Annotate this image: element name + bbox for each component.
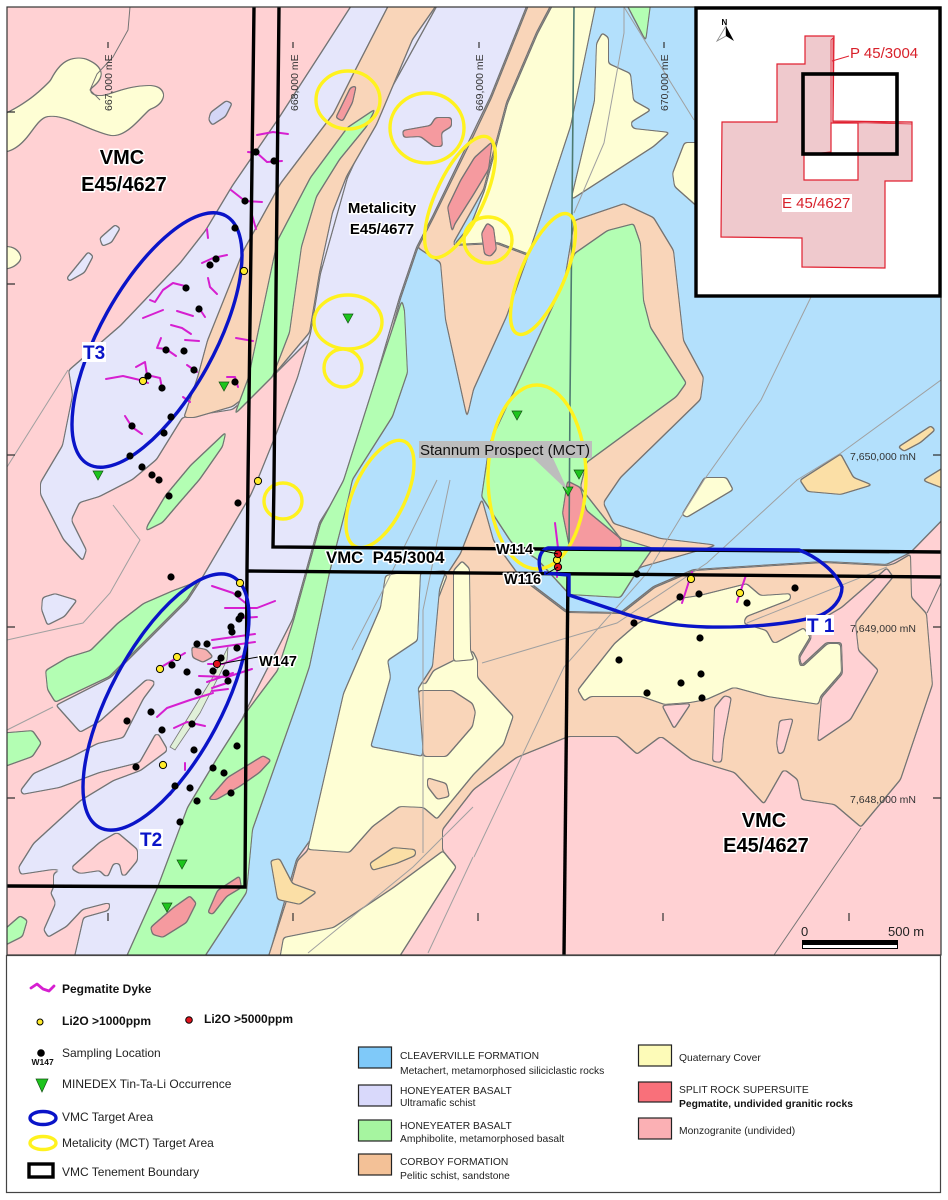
sample leader lines (220, 549, 558, 664)
tenement labels: E45/4627 (723, 835, 809, 857)
grid coordinate labels: 670,000 mE (659, 54, 671, 111)
grid coordinate labels: 7,648,000 mN (850, 794, 916, 806)
legend: Cleaverville Formation: Metachert, metamorphosed siliciclastic rocks (400, 1066, 604, 1077)
sampling locations (123, 148, 799, 826)
legend: Split Rock Supersuite (638, 1082, 853, 1110)
legend: MINEDEX occurrence: MINEDEX Tin-Ta-Li Occurrence (62, 1077, 232, 1091)
tenement labels (81, 147, 809, 857)
legend: Li2O 1000ppm: Li2O >1000ppm (62, 1014, 151, 1028)
tenement labels: VMC P45/3004 (326, 548, 445, 567)
grid coordinate labels: 7,650,000 mN (850, 451, 916, 463)
target labels: T2 (140, 830, 162, 851)
MINEDEX occurrences (93, 314, 584, 912)
inset location map: P 45/3004 (850, 45, 918, 62)
legend: Honeyeater Basalt ultramafic: HONEYEATER BASALT (400, 1086, 512, 1097)
legend: Corboy Formation: Pelitic schist, sandstone (400, 1171, 510, 1182)
tenement labels: E45/4627 (81, 174, 167, 196)
legend: Corboy Formation: CORBOY FORMATION (400, 1157, 508, 1168)
legend: Li2O 5000ppm: Li2O >5000ppm (204, 1012, 293, 1026)
legend: sampling location: W147 (32, 1057, 54, 1067)
legend: pegmatite dyke: Pegmatite Dyke (62, 982, 152, 996)
legend: Split Rock Supersuite: SPLIT ROCK SUPERSUITE (679, 1085, 809, 1096)
scale bar: 0 (801, 924, 808, 939)
target labels: T3 (83, 343, 105, 364)
legend: Honeyeater Basalt ultramafic (358, 1085, 512, 1109)
callout: Stannum Prospect (419, 441, 592, 491)
icon: north arrow (717, 18, 734, 41)
tenement labels: VMC (742, 810, 786, 832)
legend: tenement boundary: VMC Tenement Boundary (62, 1165, 199, 1179)
legend: Quaternary Cover: Quaternary Cover (679, 1053, 761, 1064)
grid coordinate labels: 668,000 mE (289, 54, 301, 111)
legend: Split Rock Supersuite: Pegmatite, undivided granitic rocks (679, 1099, 853, 1110)
Li2O over 5000ppm points (213, 550, 562, 668)
tenement labels: W116 (504, 572, 541, 588)
tenement labels: Metalicity (348, 200, 417, 217)
legend: Monzogranite (638, 1118, 795, 1139)
grid coordinate labels: 669,000 mE (474, 54, 486, 111)
legend: Metalicity target area: Metalicity (MCT) Target Area (62, 1136, 214, 1150)
VMC target areas T1 T2 T3 (38, 188, 842, 854)
legend: Honeyeater Basalt amphibolite (358, 1120, 564, 1145)
pegmatite dykes (106, 132, 746, 795)
legend: Corboy Formation (358, 1154, 510, 1182)
scale bar (801, 924, 924, 948)
scale bar: 500 m (888, 924, 924, 939)
tenement labels: E45/4677 (350, 221, 414, 238)
tenement labels: VMC (100, 147, 144, 169)
target labels (82, 342, 835, 851)
legend: Honeyeater Basalt amphibolite: HONEYEATER BASALT (400, 1121, 512, 1132)
survey line (569, 7, 574, 548)
Li2O over 1000ppm points (139, 267, 744, 769)
legend: Honeyeater Basalt amphibolite: Amphibolite, metamorphosed basalt (400, 1134, 564, 1145)
map grid ticks (7, 42, 941, 921)
legend: Monzogranite: Monzogranite (undivided) (679, 1126, 795, 1137)
inset location map (696, 8, 940, 296)
icon: north arrow: N (722, 18, 728, 27)
geological contact, north-west (90, 7, 130, 100)
tenement labels: W114 (496, 542, 533, 558)
map frame (7, 7, 941, 955)
Metalicity (MCT) target areas (264, 71, 589, 569)
grid coordinate labels: 7,649,000 mN (850, 623, 916, 635)
grid coordinate labels: 667,000 mE (103, 54, 115, 111)
legend panel (6, 956, 940, 1192)
tenement boundaries (7, 7, 941, 955)
grid coordinate labels (103, 54, 916, 806)
legend: sampling location (32, 1046, 161, 1067)
legend: Cleaverville Formation (358, 1047, 604, 1077)
tenement labels: W147 (259, 654, 297, 670)
target labels: T 1 (807, 616, 835, 637)
inset location map: E 45/4627 (782, 195, 850, 212)
callout: Stannum Prospect: Stannum Prospect (MCT) (420, 442, 590, 459)
legend: sampling location: Sampling Location (62, 1046, 161, 1060)
faults (7, 7, 941, 955)
legend: Cleaverville Formation: CLEAVERVILLE FORMATION (400, 1051, 539, 1062)
legend: Honeyeater Basalt ultramafic: Ultramafic schist (400, 1098, 476, 1109)
legend: VMC target area: VMC Target Area (62, 1110, 153, 1124)
legend: Quaternary Cover (638, 1045, 761, 1066)
